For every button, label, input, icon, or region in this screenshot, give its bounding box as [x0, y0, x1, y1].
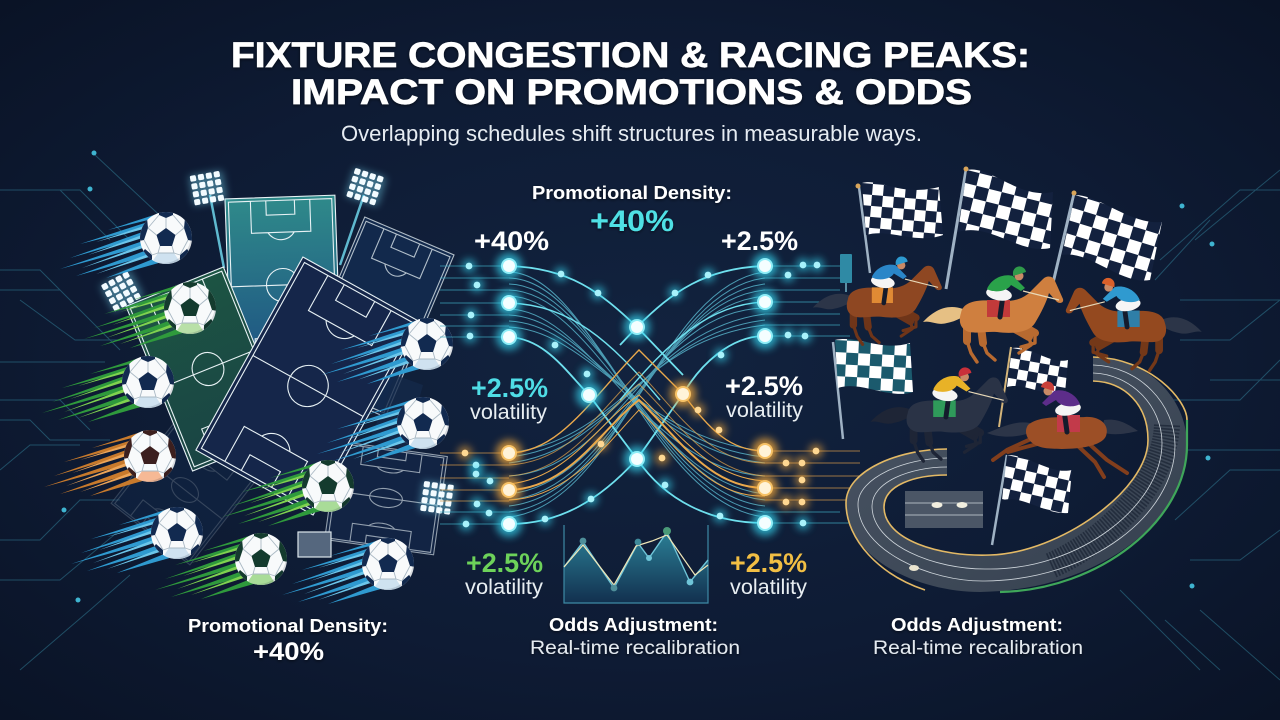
stat: green volatility: volatility — [465, 576, 544, 599]
pitch: lower right — [325, 441, 447, 555]
flag 2 — [946, 166, 1053, 289]
right lower nodes — [713, 438, 823, 536]
horse: green jockey — [923, 266, 1063, 362]
flag 3 — [1053, 190, 1162, 283]
circuit lines: left — [0, 150, 170, 670]
label: odds adjustment centre: Real-time recalibration — [530, 638, 740, 659]
label: promotional density: +40% — [253, 638, 324, 666]
circuit lines: right — [1120, 170, 1280, 680]
stat: white volatility — [725, 371, 804, 422]
label: odds adjustment centre: Odds Adjustment: — [549, 615, 718, 635]
ball: orange — [44, 422, 178, 496]
blue curves: lower left to upper right — [509, 272, 765, 517]
label: odds adjustment right: Odds Adjustment: — [891, 615, 1063, 635]
subtitle: Overlapping schedules shift structures in measurable ways. — [341, 121, 922, 146]
stat: teal volatility: volatility — [470, 401, 548, 424]
flag 4 teal — [833, 339, 913, 439]
pitch: faint mid right — [370, 375, 423, 450]
ball: green 1 — [84, 274, 218, 348]
panel: football pitches — [100, 167, 457, 565]
pitch: main navy — [196, 257, 420, 515]
promotional density heading: Promotional Density: — [532, 183, 732, 203]
stat: gold volatility: volatility — [730, 576, 808, 599]
ball: green-trail 2 — [42, 348, 176, 422]
label: odds adjustment right: Real-time recalibration — [873, 638, 1083, 659]
label: promotional density: Promotional Density: — [188, 616, 388, 636]
stat: teal volatility — [470, 373, 548, 424]
promotional density heading: +40% — [590, 205, 674, 238]
flags — [833, 166, 1162, 545]
stat: green volatility: +2.5% — [466, 548, 543, 578]
line chart — [564, 525, 708, 603]
flag 6 — [992, 455, 1072, 545]
left top nodes — [462, 253, 605, 381]
ball: blue 1 — [60, 204, 194, 278]
promotional density heading — [532, 183, 732, 238]
stat: +2.5% top right: +2.5% — [721, 226, 798, 256]
horse: purple jockey — [987, 381, 1138, 477]
ball: green 4 — [222, 452, 356, 526]
stat: gold volatility: +2.5% — [730, 548, 807, 578]
stat: gold volatility — [730, 548, 808, 599]
horse: teal jockey — [1066, 278, 1202, 371]
stat: green volatility — [465, 548, 544, 599]
stat: white volatility: volatility — [726, 399, 804, 422]
goal net — [298, 532, 331, 557]
ball: blue 4 — [317, 389, 451, 463]
title: IMPACT ON PROMOTIONS & ODDS — [291, 73, 972, 112]
ball: green 3 — [155, 525, 289, 599]
ball: blue 2 — [71, 499, 205, 573]
pitch: navy right — [296, 217, 454, 417]
ball: blue 5 — [321, 310, 455, 384]
label: promotional density — [188, 616, 388, 666]
stat: white volatility: +2.5% — [725, 371, 803, 401]
ball: blue 3 — [282, 530, 416, 604]
horse: blue jockey — [813, 256, 942, 344]
pitch: green — [126, 267, 290, 471]
track — [846, 357, 1187, 592]
left lower nodes — [458, 440, 552, 537]
info sign — [840, 254, 852, 292]
network: crossing flow lines — [440, 253, 860, 537]
pitch: teal — [225, 195, 341, 375]
title — [231, 36, 1030, 112]
pitch: faint lower left — [111, 415, 259, 565]
label: odds adjustment right — [873, 615, 1083, 659]
centre nodes — [576, 314, 726, 506]
right top nodes — [668, 253, 824, 362]
blue curves: upper left to lower right — [509, 272, 765, 517]
flag 1 — [856, 182, 943, 273]
label: odds adjustment centre — [530, 615, 740, 659]
orange curves — [509, 350, 765, 500]
track straight section — [905, 491, 983, 528]
title: FIXTURE CONGESTION & RACING PEAKS: — [231, 36, 1030, 75]
stat: teal volatility: +2.5% — [471, 373, 548, 403]
floodlights — [189, 170, 227, 206]
stat: +40%: +40% — [474, 226, 549, 256]
bright curves — [509, 266, 765, 524]
footballs with motion trails — [42, 204, 455, 604]
flag 5 — [999, 347, 1068, 427]
horses — [813, 256, 1202, 477]
horizontal feeds left and right — [440, 266, 860, 524]
floodlight poles — [210, 195, 364, 268]
horse: yellow jockey — [870, 367, 1008, 461]
